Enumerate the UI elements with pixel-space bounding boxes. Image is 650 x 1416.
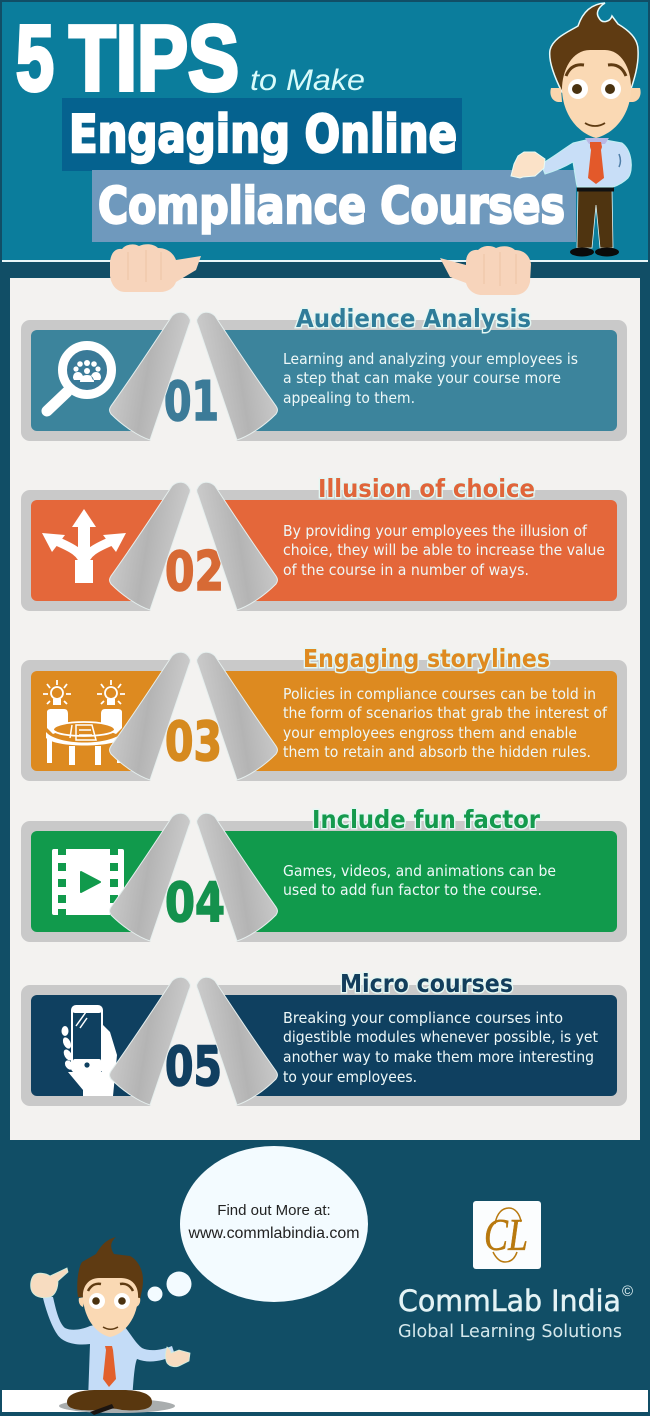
icon: meeting with bulbs — [43, 680, 125, 765]
description: of the course in a number of ways. — [283, 561, 529, 579]
description: digestible modules whenever possible, is yet — [283, 1028, 598, 1046]
description: choice, they will be able to increase the value — [283, 541, 605, 559]
panel: tip 3 Engaging storylines — [21, 644, 627, 782]
description: the form of scenarios that grab the interest of — [283, 704, 608, 722]
page fold — [110, 482, 278, 610]
description: used to add fun factor to the course. — [283, 881, 542, 899]
description: another way to make them more interesting — [283, 1048, 594, 1066]
brand name — [398, 1283, 633, 1342]
panel: tip 2 Illusion of choice — [21, 474, 627, 612]
description: Learning and analyzing your employees is — [283, 350, 578, 368]
description — [283, 350, 578, 407]
panel: tip 1 Audience Analysis — [21, 304, 627, 442]
number 04: 04 — [165, 871, 225, 934]
logo: CL — [484, 1210, 528, 1260]
icon: magnifier with people — [47, 346, 112, 411]
description — [283, 522, 605, 579]
footer white band — [2, 1390, 648, 1412]
title: to Make — [250, 64, 365, 97]
title: Compliance Courses — [98, 177, 565, 235]
description: Breaking your compliance courses into — [283, 1009, 563, 1027]
description: Policies in compliance courses can be told in — [283, 685, 596, 703]
description: Games, videos, and animations can be — [283, 862, 556, 880]
brand name: © — [622, 1283, 633, 1300]
description — [283, 1009, 598, 1086]
speech bubble — [148, 1146, 368, 1302]
description — [283, 685, 608, 761]
page fold — [110, 312, 278, 440]
description: to your employees. — [283, 1068, 417, 1086]
panel: tip 5 Micro courses — [21, 969, 627, 1107]
icon: hand holding phone — [61, 1006, 117, 1096]
title — [16, 6, 576, 242]
brand name: Global Learning Solutions — [398, 1321, 622, 1342]
description: By providing your employees the illusion of — [283, 522, 588, 540]
icon: film strip — [52, 849, 124, 915]
brand name: CommLab India — [398, 1284, 621, 1318]
heading: Include fun factor — [312, 805, 541, 834]
page fold — [110, 813, 278, 941]
speech bubble: Find out More at: — [217, 1202, 331, 1219]
number 05: 05 — [165, 1035, 222, 1098]
number 03: 03 — [165, 710, 222, 773]
title: Engaging Online — [69, 105, 457, 165]
panel: tip 4 Include fun factor — [21, 805, 627, 943]
description: your employees engross them and enable — [283, 724, 577, 742]
hands holding panel — [110, 244, 531, 295]
heading: Audience Analysis — [296, 304, 531, 333]
number 01: 01 — [164, 370, 219, 433]
description: appealing to them. — [283, 389, 415, 407]
heading: Micro courses — [340, 969, 513, 998]
description: a step that can make your course more — [283, 369, 561, 387]
page fold — [110, 652, 278, 780]
title: 5 — [16, 6, 54, 110]
page fold — [110, 977, 278, 1105]
icon: branching arrows — [42, 509, 126, 583]
content panel — [10, 278, 640, 1140]
header background — [2, 2, 648, 262]
character: standing man — [511, 3, 641, 256]
heading: Illusion of choice — [318, 474, 535, 503]
heading: Engaging storylines — [303, 644, 550, 673]
number 02: 02 — [165, 540, 224, 603]
speech bubble: www.commlabindia.com — [187, 1225, 360, 1242]
logo — [473, 1201, 541, 1269]
character: seated man — [31, 1237, 190, 1415]
description: them to retain and absorb the hidden rules. — [283, 743, 591, 761]
description — [283, 862, 556, 899]
title: TIPS — [69, 6, 239, 110]
